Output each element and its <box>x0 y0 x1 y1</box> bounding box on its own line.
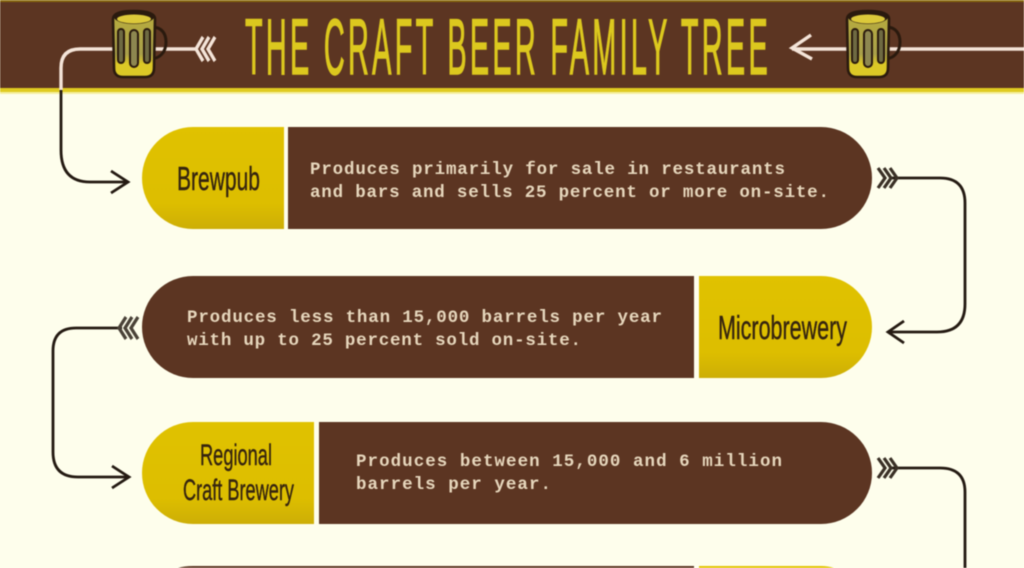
panel: Microbrewery: Microbrewery <box>718 309 847 346</box>
panel: Brewpub: and bars and sells 25 percent or more on-site. <box>310 183 829 203</box>
panel: next tier, cropped <box>178 566 834 568</box>
panel: Regional Craft Brewery: Produces between 15,000 and 6 million <box>356 452 782 472</box>
panel: Regional Craft Brewery: Craft Brewery <box>183 474 294 507</box>
panel: Regional Craft Brewery: barrels per year. <box>356 475 551 495</box>
arrow: Microbrewery to Regional Craft Brewery <box>53 317 138 488</box>
panel: Microbrewery: Produces less than 15,000 barrels per year <box>187 308 662 328</box>
arrow: Brewpub to Microbrewery <box>878 168 965 343</box>
panel: Microbrewery <box>142 276 872 378</box>
panel: Brewpub: Brewpub <box>177 160 260 197</box>
arrow: header right into mug <box>792 35 1024 59</box>
panel: Brewpub <box>142 127 872 229</box>
header banner <box>0 0 1024 94</box>
panel: Regional Craft Brewery <box>142 422 872 524</box>
icon: left beer mug <box>113 10 166 77</box>
arrow: header left mug down to Brewpub <box>61 37 215 193</box>
icon: right beer mug <box>847 10 900 77</box>
panel: Brewpub: Produces primarily for sale in restaurants <box>310 160 785 180</box>
panel: Regional Craft Brewery: Regional <box>200 439 272 472</box>
arrow: Regional Craft Brewery to next tier <box>878 458 965 568</box>
panel: Microbrewery: with up to 25 percent sold on-site. <box>187 331 581 351</box>
